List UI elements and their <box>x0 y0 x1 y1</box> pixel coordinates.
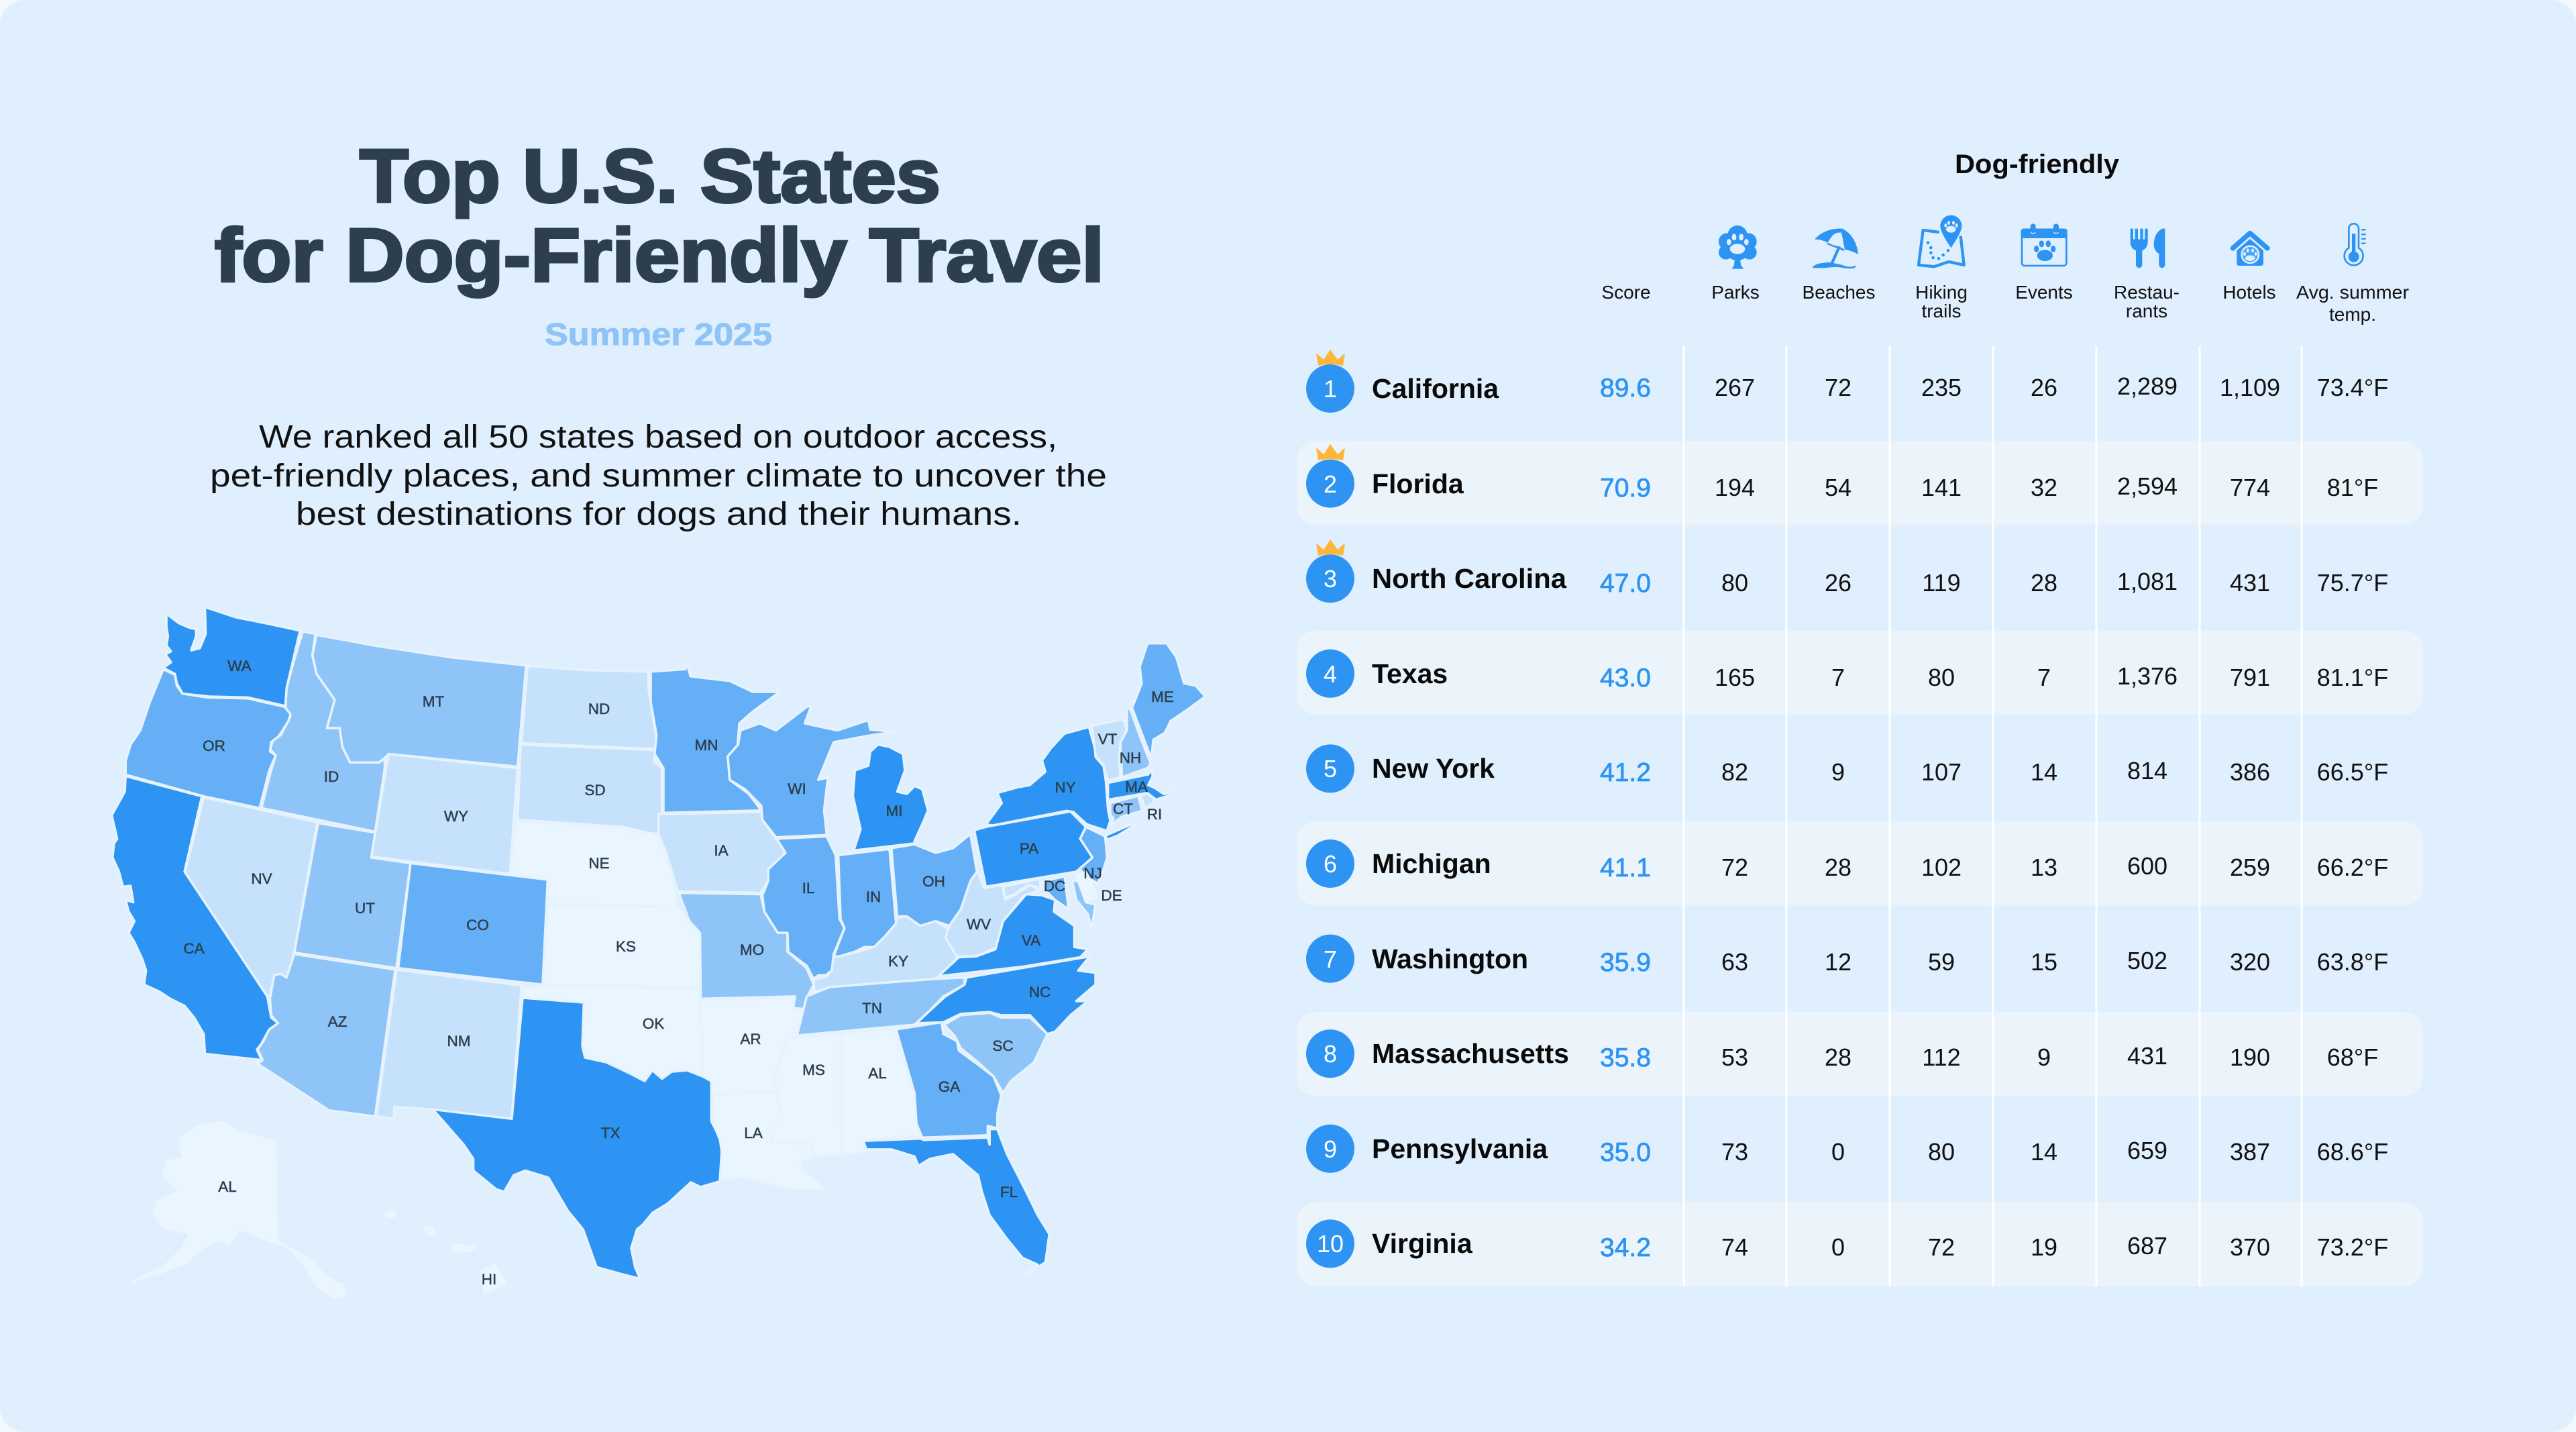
row 8: Massachusetts <box>1306 1029 2378 1078</box>
state: Washington <box>164 607 300 706</box>
state: Massachusetts <box>1108 770 1173 800</box>
row 1: California: California <box>1372 373 1499 404</box>
column headers: Events <box>2015 282 2073 303</box>
state abbreviation labels: PA <box>1020 840 1038 857</box>
state abbreviation labels: IA <box>714 842 729 859</box>
row 5: New York: 107 <box>1921 758 1962 786</box>
state abbreviation labels: TX <box>601 1125 620 1141</box>
row 2: Florida: 2 <box>1324 470 1337 498</box>
state: Kentucky <box>814 917 961 992</box>
icon: hotels dog house <box>2233 233 2267 266</box>
state abbreviation labels: ME <box>1151 688 1174 705</box>
row 4: Texas: 7 <box>2037 664 2051 691</box>
row 3: North Carolina: 1,081 <box>2117 568 2178 595</box>
row 8: Massachusetts: 35.8 <box>1600 1043 1651 1072</box>
intro paragraph: best destinations for dogs and their humans. <box>296 497 1022 532</box>
row 2: Florida: 141 <box>1921 474 1962 501</box>
state abbreviation labels: MI <box>885 803 903 819</box>
column headers: Beaches <box>1803 282 1875 303</box>
row 1: California: 73.4°F <box>2317 374 2388 401</box>
state: Rhode Island <box>1141 794 1155 809</box>
state: Hawaii <box>481 1265 506 1293</box>
title: Top U.S. States <box>360 134 941 218</box>
row 1: California: 26 <box>2031 374 2057 401</box>
icon: gold crowns for top 3 <box>1316 350 1345 556</box>
state abbreviation labels: MS <box>802 1062 825 1078</box>
state abbreviation labels: MN <box>695 737 718 754</box>
row 6: Michigan: 28 <box>1825 854 1851 881</box>
state: Florida <box>863 1129 1049 1276</box>
state: Maryland <box>1044 876 1069 909</box>
row 4: Texas: Texas <box>1372 658 1448 689</box>
state: North Carolina <box>916 956 1095 1034</box>
state: Utah <box>294 823 411 968</box>
row 7: Washington: 15 <box>2031 948 2057 976</box>
row 9: Pennsylvania: 35.0 <box>1600 1138 1651 1167</box>
row 2: Florida <box>1306 460 2378 508</box>
column headers: Parks <box>1711 282 1760 303</box>
Long Island <box>1106 824 1134 840</box>
state abbreviation labels: CO <box>466 917 489 933</box>
subtitle: Summer 2025: Summer 2025 <box>545 317 772 352</box>
row 5: New York: 14 <box>2031 758 2057 786</box>
row 7: Washington: 35.9 <box>1600 948 1651 977</box>
title <box>215 134 1104 297</box>
row 5: New York: 5 <box>1324 755 1337 782</box>
column headers: Avg. summer <box>2296 282 2409 303</box>
state abbreviation labels: DC <box>1044 878 1065 894</box>
hawaiian island <box>425 1227 435 1234</box>
state abbreviation labels: OK <box>643 1015 664 1032</box>
row 2: Florida: 81°F <box>2327 474 2378 501</box>
state: Missouri <box>679 893 814 1009</box>
state abbreviation labels: AL <box>218 1178 237 1195</box>
row 4: Texas: 43.0 <box>1600 664 1651 693</box>
row 10: Virginia: 370 <box>2230 1233 2270 1261</box>
icon: thermometer <box>2345 223 2366 265</box>
icon: beach umbrella <box>1813 229 1858 268</box>
row 10: Virginia: 72 <box>1928 1233 1955 1261</box>
row 7: Washington: Washington <box>1372 943 1528 974</box>
row 2: Florida: 2,594 <box>2117 472 2178 500</box>
row 9: Pennsylvania <box>1306 1125 2388 1173</box>
row 8: Massachusetts: 68°F <box>2327 1043 2378 1071</box>
state: Pennsylvania <box>974 811 1092 886</box>
state abbreviation labels: AZ <box>328 1013 347 1030</box>
state: Montana <box>313 635 526 767</box>
row 9: Pennsylvania: 73 <box>1721 1138 1748 1166</box>
western states <box>112 607 722 1298</box>
row 1: California <box>1306 364 2388 413</box>
state abbreviation labels: WV <box>967 916 991 933</box>
eastern states <box>651 644 1205 1276</box>
column headers: Score <box>1601 282 1651 303</box>
state abbreviation labels: CT <box>1113 801 1133 817</box>
state: Maine <box>1132 644 1205 759</box>
row 8: Massachusetts: 431 <box>2127 1042 2167 1070</box>
state: Idaho <box>262 631 385 831</box>
state: Indiana <box>834 849 896 956</box>
state: South Carolina <box>944 1013 1047 1093</box>
state: New Mexico <box>376 970 521 1119</box>
row 5: New York: 66.5°F <box>2317 758 2388 786</box>
state: Alaska <box>133 1122 344 1298</box>
row 10: Virginia: 0 <box>1831 1233 1845 1261</box>
row 1: California: 1,109 <box>2220 374 2280 401</box>
state: Iowa <box>659 812 786 893</box>
row 8: Massachusetts: 190 <box>2230 1043 2270 1071</box>
New England states <box>986 708 1173 840</box>
state: Kansas <box>543 905 700 987</box>
row 6: Michigan: Michigan <box>1372 848 1491 879</box>
state abbreviation labels: NE <box>588 855 610 872</box>
row 6: Michigan: 102 <box>1921 854 1962 881</box>
row 5: New York: 386 <box>2230 758 2270 786</box>
state: Connecticut <box>1110 796 1142 825</box>
state abbreviation labels: FL <box>1000 1184 1018 1200</box>
state: Michigan <box>853 745 928 850</box>
column headers: trails <box>1921 301 1962 321</box>
row 1: California: 267 <box>1715 374 1755 401</box>
alternating row bands <box>1297 441 2423 1286</box>
row 6: Michigan: 41.1 <box>1600 854 1651 882</box>
row 9: Pennsylvania: 68.6°F <box>2317 1138 2388 1166</box>
row 6: Michigan <box>1306 839 2388 888</box>
row 1: California: 1 <box>1324 375 1337 403</box>
row 6: Michigan: 259 <box>2230 854 2270 881</box>
row 4: Texas <box>1306 650 2388 698</box>
row 8: Massachusetts: 112 <box>1922 1043 1961 1071</box>
state abbreviation labels: IL <box>802 880 814 897</box>
state abbreviation labels: VT <box>1098 731 1118 748</box>
row 10: Virginia: 34.2 <box>1600 1233 1651 1262</box>
state: West Virginia <box>945 867 1040 956</box>
state: Oregon <box>125 669 290 808</box>
row 5: New York: New York <box>1372 753 1495 784</box>
state abbreviation labels: HI <box>482 1271 496 1288</box>
row 2: Florida: 54 <box>1825 474 1851 501</box>
row 4: Texas: 7 <box>1831 664 1845 691</box>
state abbreviation labels: ND <box>588 701 610 717</box>
row 10: Virginia: 74 <box>1721 1233 1748 1261</box>
row 4: Texas: 1,376 <box>2117 662 2178 690</box>
column headers: Hiking <box>1915 282 1968 303</box>
state abbreviation labels: GA <box>938 1078 960 1095</box>
row 8: Massachusetts: 53 <box>1721 1043 1748 1071</box>
row 7: Washington: 59 <box>1928 948 1955 976</box>
column headers <box>1601 282 2409 325</box>
column headers: Hotels <box>2222 282 2276 303</box>
row 9: Pennsylvania: 0 <box>1831 1138 1845 1166</box>
state abbreviation labels: ID <box>324 768 339 785</box>
row 7: Washington: 63.8°F <box>2317 948 2388 976</box>
state: Tennessee <box>797 978 965 1035</box>
row 4: Texas: 165 <box>1715 664 1755 691</box>
icon: restaurants fork and knife <box>2131 229 2165 268</box>
state abbreviation labels: WY <box>444 808 468 825</box>
row 4: Texas: 4 <box>1324 660 1337 688</box>
row 6: Michigan: 6 <box>1324 850 1337 878</box>
row 9: Pennsylvania: 14 <box>2031 1138 2057 1166</box>
row 5: New York <box>1306 744 2388 792</box>
state: Ohio <box>892 834 977 926</box>
row 2: Florida: 194 <box>1715 474 1755 501</box>
row 7: Washington: 12 <box>1825 948 1851 976</box>
state: Vermont <box>1091 719 1126 780</box>
row 9: Pennsylvania: Pennsylvania <box>1372 1133 1548 1164</box>
row 10: Virginia: Virginia <box>1372 1228 1473 1259</box>
state abbreviation labels: KY <box>888 953 908 970</box>
state abbreviation labels: AL <box>868 1065 887 1082</box>
row 4: Texas: 81.1°F <box>2317 664 2388 691</box>
state abbreviation labels: DE <box>1101 887 1122 904</box>
row 3: North Carolina: 431 <box>2230 569 2270 597</box>
row 1: California: 2,289 <box>2117 372 2178 400</box>
state abbreviation labels: NY <box>1055 779 1076 796</box>
state: Wyoming <box>371 754 518 874</box>
state abbreviation labels: MA <box>1125 778 1148 795</box>
state abbreviation labels: RI <box>1147 806 1162 823</box>
row 6: Michigan: 13 <box>2031 854 2057 881</box>
hawaiian island <box>452 1245 475 1252</box>
state: Colorado <box>398 863 547 984</box>
row 10: Virginia: 687 <box>2127 1232 2167 1260</box>
row 2: Florida: Florida <box>1372 468 1464 499</box>
state abbreviation labels: WI <box>788 780 806 797</box>
state: North Dakota <box>521 666 658 750</box>
state abbreviation labels: VA <box>1022 932 1040 949</box>
row 2: Florida: 70.9 <box>1600 474 1651 503</box>
row 7: Washington: 320 <box>2230 948 2270 976</box>
state: Wisconsin <box>728 705 894 837</box>
state: Texas <box>433 998 722 1279</box>
state abbreviation labels: OR <box>203 737 225 754</box>
row 3: North Carolina: 47.0 <box>1600 569 1651 598</box>
state: New Hampshire <box>1120 708 1150 777</box>
row 6: Michigan: 600 <box>2127 852 2167 880</box>
icon: parks tree with paw <box>1719 225 1757 269</box>
row 6: Michigan: 72 <box>1721 854 1748 881</box>
state abbreviation labels: TN <box>862 1000 882 1017</box>
column headers: rants <box>2126 301 2167 321</box>
state: Maryland west <box>1003 878 1041 898</box>
intro paragraph <box>210 419 1107 532</box>
state abbreviation labels: KS <box>616 938 636 955</box>
row 7: Washington <box>1306 935 2388 983</box>
Delmarva peninsula <box>1073 881 1095 928</box>
state abbreviation labels: LA <box>744 1125 763 1141</box>
state: Virginia <box>938 894 1088 976</box>
row 7: Washington: 7 <box>1324 945 1337 973</box>
state abbreviation labels: NJ <box>1083 865 1102 882</box>
row 9: Pennsylvania: 80 <box>1928 1138 1955 1166</box>
row 9: Pennsylvania: 387 <box>2230 1138 2270 1166</box>
state: Louisiana <box>712 1093 826 1189</box>
state: Nebraska <box>510 821 678 907</box>
state abbreviation labels: WA <box>227 658 252 674</box>
state abbreviation labels: IN <box>866 888 881 905</box>
state abbreviation labels: NH <box>1120 750 1141 766</box>
state: Georgia <box>896 1022 1001 1137</box>
row 5: New York: 9 <box>1831 758 1845 786</box>
column headers: temp. <box>2329 304 2376 325</box>
state: Delaware <box>1076 872 1097 901</box>
state abbreviation labels: NV <box>251 870 272 887</box>
state: Oklahoma <box>521 987 702 1081</box>
state: New Jersey <box>1078 827 1107 883</box>
state abbreviation labels: NM <box>447 1033 471 1050</box>
state: Arizona <box>258 954 395 1117</box>
row 8: Massachusetts: 28 <box>1825 1043 1851 1071</box>
row 9: Pennsylvania: 659 <box>2127 1137 2167 1164</box>
state abbreviation labels: NC <box>1029 984 1051 1001</box>
row 9: Pennsylvania: 9 <box>1324 1135 1337 1163</box>
row 10: Virginia <box>1306 1219 2388 1268</box>
row 3: North Carolina: 26 <box>1825 569 1851 597</box>
state abbreviation labels: UT <box>355 900 375 917</box>
row 2: Florida: 774 <box>2230 474 2270 501</box>
row 1: California: 235 <box>1921 374 1962 401</box>
row 3: North Carolina: North Carolina <box>1372 563 1567 594</box>
row 7: Washington: 63 <box>1721 948 1748 976</box>
row 8: Massachusetts: Massachusetts <box>1372 1038 1569 1069</box>
state: Alabama <box>841 1029 920 1154</box>
choropleth map of U.S. states <box>112 607 1205 1298</box>
state abbreviation labels: CA <box>183 940 205 957</box>
state: Minnesota <box>651 662 780 813</box>
state: California <box>112 776 278 1060</box>
row 8: Massachusetts: 9 <box>2037 1043 2051 1071</box>
state abbreviation labels: MT <box>423 693 444 710</box>
row 3: North Carolina: 119 <box>1922 569 1961 597</box>
column headers: Restau- <box>2114 282 2180 303</box>
state: Nevada <box>184 797 317 999</box>
state: South Dakota <box>518 745 662 834</box>
table heading: Dog-friendly: Dog-friendly <box>1955 150 2120 179</box>
row 5: New York: 41.2 <box>1600 758 1651 787</box>
state: Mississippi <box>770 1034 841 1156</box>
state abbreviation labels: MO <box>740 941 764 958</box>
intro paragraph: pet-friendly places, and summer climate to uncover the <box>210 458 1107 494</box>
state abbreviation labels: AR <box>740 1031 761 1047</box>
row 1: California: 72 <box>1825 374 1851 401</box>
row 10: Virginia: 10 <box>1317 1230 1344 1258</box>
state abbreviation labels: OH <box>922 873 945 890</box>
row 4: Texas: 791 <box>2230 664 2270 691</box>
row 10: Virginia: 19 <box>2031 1233 2057 1261</box>
row 1: California: 89.6 <box>1600 374 1651 403</box>
row 3: North Carolina <box>1306 554 2388 603</box>
state abbreviation labels: SD <box>584 782 606 799</box>
icon: events calendar with paw <box>2021 223 2068 266</box>
state: Arkansas <box>701 998 803 1093</box>
row 3: North Carolina: 28 <box>2031 569 2057 597</box>
hawaiian islands <box>386 1211 395 1218</box>
row 5: New York: 814 <box>2127 757 2167 784</box>
state abbreviation labels: SC <box>992 1037 1014 1054</box>
icon: hiking trail map with pin <box>1919 215 1964 266</box>
row 7: Washington: 502 <box>2127 947 2167 974</box>
row 10: Virginia: 73.2°F <box>2317 1233 2388 1261</box>
title: for Dog-Friendly Travel <box>215 213 1104 297</box>
row 5: New York: 82 <box>1721 758 1748 786</box>
intro paragraph: We ranked all 50 states based on outdoor access, <box>259 419 1057 455</box>
state: New York <box>986 727 1110 831</box>
state: Illinois <box>763 836 845 979</box>
row 3: North Carolina: 3 <box>1324 565 1337 593</box>
row 3: North Carolina: 80 <box>1721 569 1748 597</box>
row 4: Texas: 80 <box>1928 664 1955 691</box>
row 6: Michigan: 66.2°F <box>2317 854 2388 881</box>
state abbreviation labels <box>183 658 1174 1288</box>
row 2: Florida: 32 <box>2031 474 2057 501</box>
row 8: Massachusetts: 8 <box>1324 1040 1337 1068</box>
row 3: North Carolina: 75.7°F <box>2317 569 2388 597</box>
